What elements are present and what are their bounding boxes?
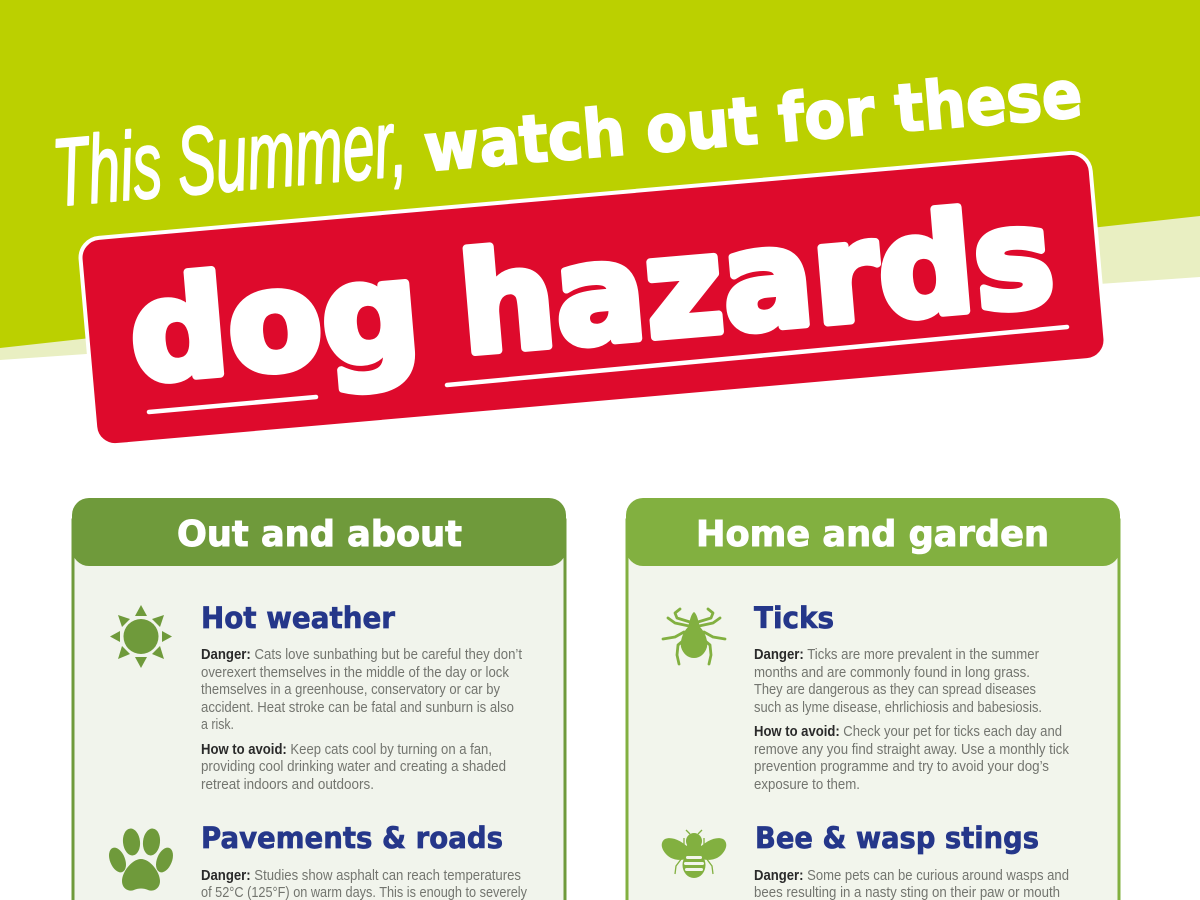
text: ticks how to avoid: exposure to them. (754, 777, 860, 793)
title: dog: dog (123, 231, 426, 414)
text: ticks danger (754, 647, 1042, 716)
text: pavements danger (201, 868, 528, 900)
text: ticks how to avoid: prevention programme and try to avoid your dog’s (754, 759, 1049, 775)
text: hot weather how to avoid: providing cool drinking water and creating a shaded (201, 759, 506, 775)
text: ticks how to avoid: remove any you find straight away. Use a monthly tick (754, 742, 1070, 758)
text: ticks danger: such as lyme disease, ehrlichiosis and babesiosis. (754, 700, 1042, 716)
text: hot weather how to avoid: How to avoid: Keep cats cool by turning on a fan, (201, 742, 492, 758)
underline: hazards (447, 327, 1067, 385)
panel heading bar: out and about (72, 498, 566, 566)
icon: sun (110, 605, 172, 668)
text: hot weather how to avoid: retreat indoors and outdoors. (201, 777, 374, 793)
title: hazards: hazards (453, 178, 1060, 386)
icon: tick (663, 609, 725, 664)
text: hot weather danger: themselves in a greenhouse, conservatory or car by (201, 682, 501, 698)
text: hot weather danger: a risk. (201, 717, 234, 733)
subtitle: This Summer,: This Summer, (49, 89, 410, 227)
panel heading bar: home and garden (626, 498, 1120, 566)
subtitle: watch out for these: watch out for these (421, 56, 1085, 187)
panel: home and garden (626, 498, 1120, 900)
icon: bee (662, 830, 726, 878)
text: hot weather how to avoid (201, 742, 506, 793)
lime green header background (0, 0, 1200, 348)
heading: pavements and roads: Pavements & roads (201, 821, 503, 855)
underline: dog (149, 397, 316, 412)
text: ticks danger: Danger: Ticks are more prevalent in the summer (754, 647, 1039, 663)
text: bee stings danger (754, 868, 1069, 900)
text: hot weather danger (201, 647, 522, 733)
heading: ticks: Ticks (754, 601, 834, 635)
text: hot weather danger: overexert themselves in the middle of the day or lock (201, 665, 510, 681)
panel heading: home and garden: Home and garden (696, 514, 1049, 555)
panel: out and about (72, 498, 566, 900)
text: ticks how to avoid (754, 724, 1070, 793)
red title banner (79, 151, 1107, 447)
text: hot weather danger: Danger: Cats love sunbathing but be careful they don’t (201, 647, 522, 663)
panel heading: out and about: Out and about (177, 514, 462, 555)
text: ticks danger: months and are commonly found in long grass. (754, 665, 1030, 681)
heading: bee and wasp stings: Bee & wasp stings (755, 821, 1039, 855)
pale green background band (0, 0, 1200, 360)
text: pavements danger: Danger: Studies show asphalt can reach temperatures (201, 868, 521, 884)
text: ticks how to avoid: How to avoid: Check your pet for ticks each day and (754, 724, 1062, 740)
text: bee stings danger: Danger: Some pets can be curious around wasps and (754, 868, 1069, 884)
icon: paw print (106, 828, 176, 891)
text: hot weather danger: accident. Heat stroke can be fatal and sunburn is also (201, 700, 514, 716)
text: ticks danger: They are dangerous as they can spread diseases (754, 682, 1036, 698)
heading: hot weather: Hot weather (201, 601, 396, 635)
